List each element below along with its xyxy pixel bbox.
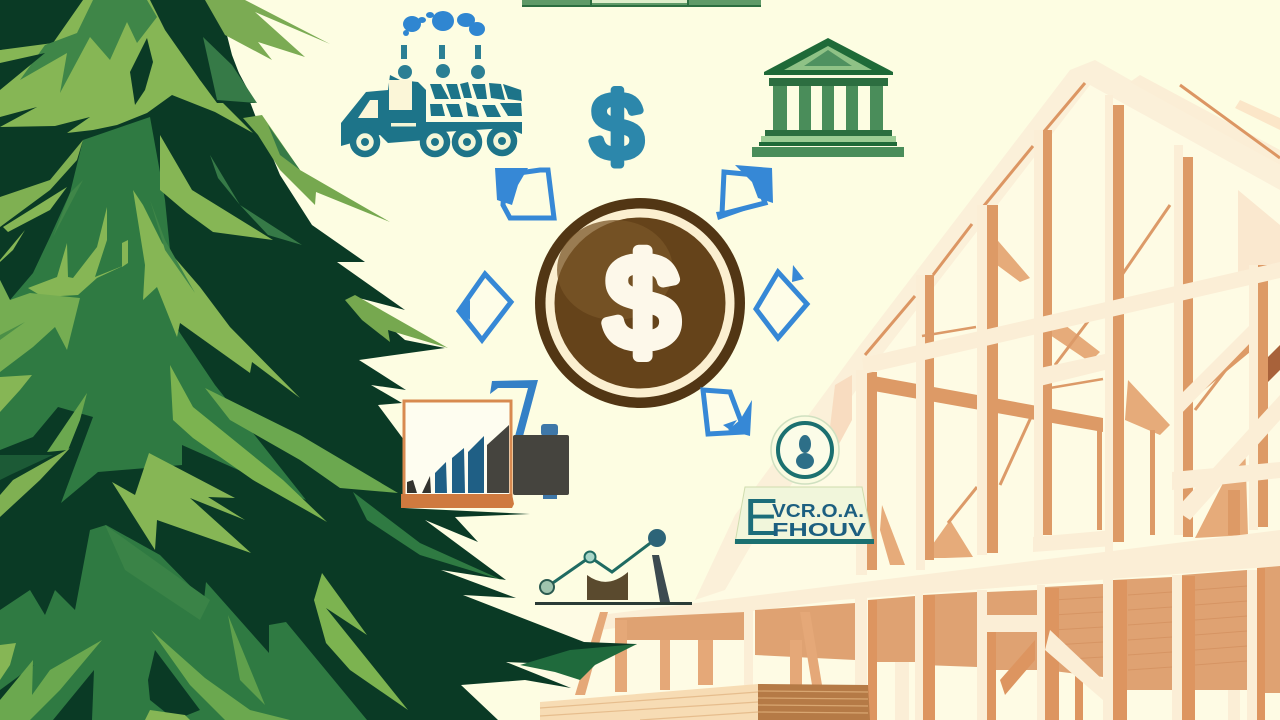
orange diagonal braces [880, 235, 1248, 565]
layer two lights [160, 135, 273, 240]
icon: blue dollar sign: $ [591, 76, 643, 178]
right mid branch [243, 115, 390, 222]
porch legs [575, 612, 822, 695]
lower orange studs [868, 568, 1265, 720]
icon: badge with label [735, 416, 874, 547]
orange roof strips [865, 83, 1280, 355]
icon: badge with label: FHOUV [772, 520, 866, 540]
arrow: left diamond [457, 274, 511, 340]
icon: factory chart with briefcase [401, 380, 569, 508]
stacks [398, 45, 485, 79]
tree dark silhouette [0, 0, 637, 720]
smoke clouds [403, 11, 485, 36]
wheels [353, 129, 514, 154]
long right stripes [205, 388, 398, 493]
cream stud edges [856, 95, 1258, 575]
coin with dollar sign: $ [606, 229, 678, 375]
cargo blocks [430, 82, 522, 117]
chart spikes [407, 425, 509, 493]
side mid branch [353, 492, 502, 580]
pale wall diagonal near badge [825, 375, 852, 470]
orange cross rails [868, 335, 1280, 432]
cream horizontal beams [600, 262, 1280, 630]
lower cream studs [744, 570, 1257, 720]
arrow: bottom right [703, 390, 752, 436]
briefcase [513, 435, 569, 495]
louvre lines [1053, 586, 1247, 670]
chart frame [404, 401, 511, 499]
fir tree [0, 0, 637, 720]
lumber stack [540, 684, 870, 720]
chart base [401, 494, 514, 508]
lower walls [615, 566, 1280, 693]
roof cream edge [695, 60, 1280, 600]
top right branch [205, 0, 330, 60]
arrow: top right [716, 165, 773, 220]
arrow: top left [495, 168, 554, 218]
top dark wedges [157, 0, 255, 103]
coin with dollar sign [535, 198, 745, 408]
light branch with uprights [28, 207, 125, 297]
left dark stripes [47, 393, 87, 452]
left light bands [0, 140, 83, 227]
upper left branch [0, 0, 253, 133]
upper mid patches [20, 0, 157, 93]
bottom dark wedges [148, 650, 200, 720]
central mid green trunk mass [0, 117, 306, 503]
thin rails under beam [922, 327, 1103, 389]
big light band [133, 190, 300, 398]
icon: badge with label: VCR.O.A. [772, 501, 864, 521]
roof and interior wash [540, 65, 1280, 720]
cab and chassis [341, 75, 522, 146]
label plate [735, 487, 873, 543]
lower right green leaf [520, 644, 637, 680]
top bill strip [522, 0, 761, 7]
label text: E [744, 489, 779, 547]
briefcase handle [541, 424, 558, 436]
icon: truck with smoke [341, 11, 522, 154]
blue seven arrow [490, 380, 538, 440]
bottom lights [314, 573, 408, 710]
arrow: right diamond [756, 265, 807, 338]
left soft green mass [0, 280, 80, 372]
bottom mid mass [0, 525, 367, 720]
upper orange studs [867, 105, 1268, 570]
icon: line chart on baseline [535, 529, 692, 605]
house timber frame [540, 60, 1280, 720]
icon: bank building [752, 38, 904, 157]
